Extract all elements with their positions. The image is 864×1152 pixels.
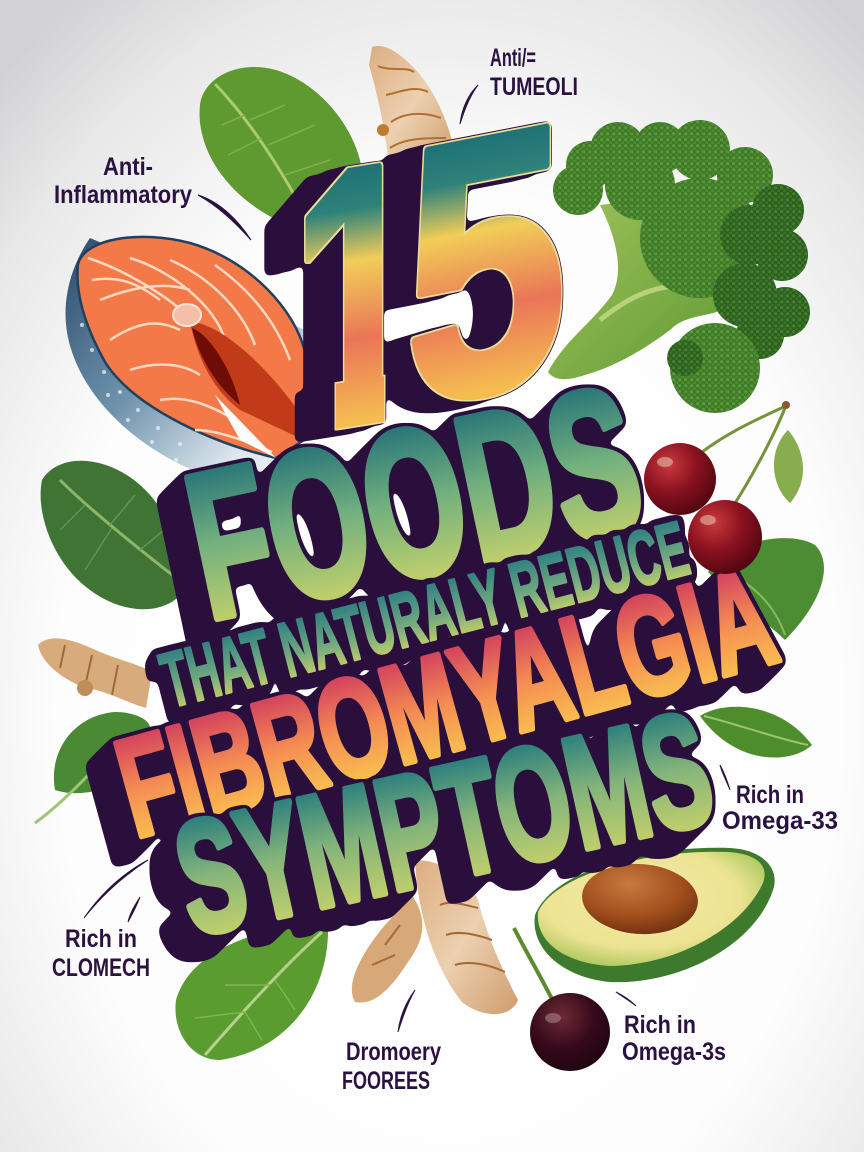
icon: spinach leaf top: [200, 67, 362, 228]
icon: cherries with stems and leaf: [644, 401, 803, 574]
icon: small green leaf right: [700, 707, 812, 758]
label: Anti TUMEOLI: TUMEOLI: [490, 73, 578, 101]
icon: turmeric root bottom: [352, 860, 518, 1014]
icon: dark spinach leaf left: [41, 461, 187, 609]
label: Anti-Inflammatory: Anti-: [103, 153, 153, 181]
icon: ginger root left: [38, 638, 152, 708]
label: Rich in Omega-3s: [616, 992, 726, 1066]
label: Anti-Inflammatory: [54, 153, 251, 240]
icon: dark cherry bottom: [514, 928, 610, 1071]
icon: spinach leaf bottom: [175, 925, 328, 1060]
label: Rich in Omega-3s: Omega-3s: [622, 1038, 726, 1066]
icon: green leaf left: [35, 712, 150, 823]
label: Dromoery FOOREES: [342, 990, 441, 1095]
label: Dromoery FOOREES: FOOREES: [342, 1067, 430, 1095]
title number: 15: 1: [292, 81, 423, 510]
icon: broccoli: [548, 120, 810, 413]
label: Anti-Inflammatory: Inflammatory: [54, 181, 192, 209]
title number: 15: 5: [406, 45, 566, 484]
label: Rich in CLOMECH: CLOMECH: [52, 954, 150, 982]
title number: 15: [264, 122, 564, 442]
label: Rich in Omega-33: Rich in: [736, 781, 804, 809]
label: Rich in CLOMECH: Rich in: [65, 925, 137, 953]
icon: salmon steak: [66, 237, 305, 486]
label: Rich in Omega-33: [720, 765, 838, 835]
icon: green leaf right: [708, 538, 824, 640]
label: Rich in CLOMECH: [52, 860, 150, 982]
icon: turmeric root top: [369, 46, 453, 168]
label: Anti TUMEOLI: [460, 44, 578, 124]
label: Dromoery FOOREES: Dromoery: [346, 1038, 441, 1066]
label: Anti TUMEOLI: Anti/=: [490, 44, 536, 72]
label: Rich in Omega-3s: Rich in: [624, 1011, 696, 1039]
label: Rich in Omega-33: Omega-33: [722, 807, 838, 835]
icon: avocado half: [535, 848, 775, 982]
